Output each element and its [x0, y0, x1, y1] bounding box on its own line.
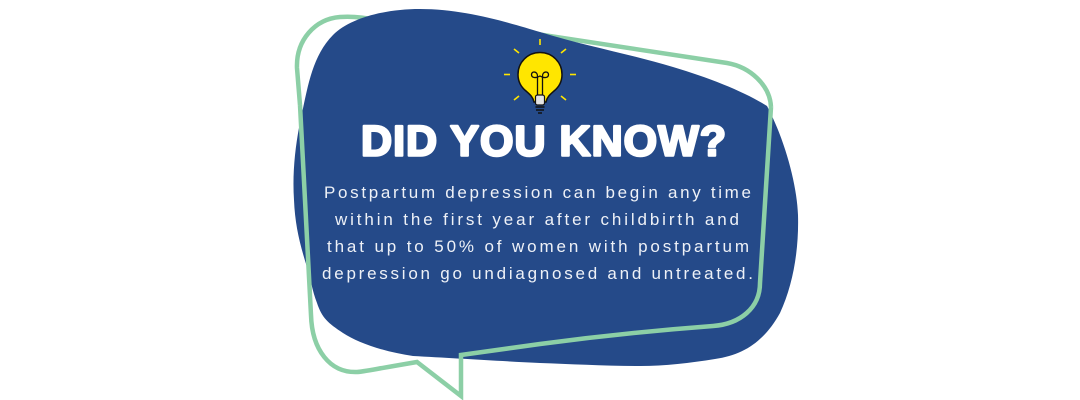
- bulb base: [536, 95, 544, 105]
- bulb rays: [504, 39, 576, 100]
- body text: [322, 183, 753, 283]
- line 4: depression go undiagnosed and untreated.: [322, 264, 753, 283]
- icon: light bulb: [504, 39, 576, 113]
- bulb glass: [518, 52, 562, 102]
- speech bubble outline: top part behind the blob: [297, 17, 771, 107]
- line 1: Postpartum depression can begin any time: [324, 183, 751, 202]
- title: DID YOU KNOW?: [361, 118, 726, 166]
- panel: navy blob background: [293, 9, 798, 366]
- bulb filament: [532, 72, 548, 95]
- line 3: that up to 50% of women with postpartum: [327, 237, 749, 256]
- bulb screw: [536, 107, 544, 113]
- speech bubble outline: sides and tail over the blob: [300, 105, 771, 396]
- line 2: within the first year after childbirth and: [334, 210, 739, 229]
